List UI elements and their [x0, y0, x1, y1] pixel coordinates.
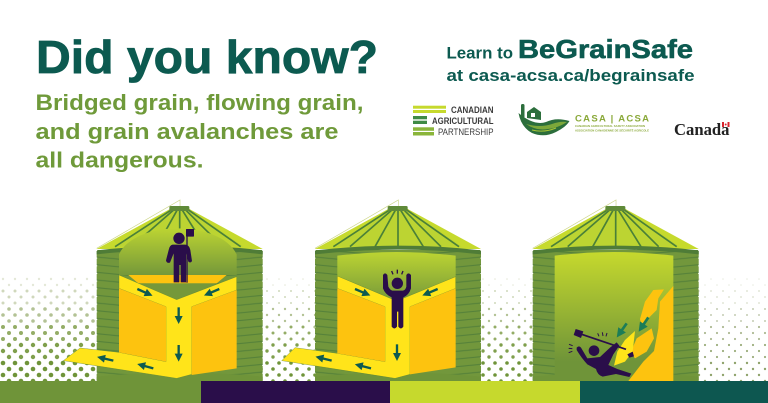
title: Did you know? — [36, 31, 378, 83]
upper grain flame — [640, 289, 664, 327]
interior — [555, 252, 673, 381]
interior dome — [119, 228, 237, 275]
bridged cavity — [138, 283, 217, 300]
halftone dot background — [0, 276, 768, 381]
logo: CASA ACSA: ASSOCIATION CANADIENNE DE SÉCURITÉ AGRICOLE — [575, 128, 649, 132]
bottom colour bar — [0, 381, 768, 403]
subtitle text block — [36, 90, 364, 172]
flow arrows — [96, 285, 221, 372]
grain surface band — [128, 275, 227, 283]
person sinking with raised arms — [383, 270, 411, 328]
logo: Canadian Agricultural Partnership — [413, 105, 494, 138]
person falling with shovel — [569, 329, 634, 377]
middle grain flame — [631, 328, 654, 358]
flow arrows — [315, 285, 439, 372]
logo: Canadian Agricultural Partnership: PARTNERSHIP — [438, 127, 494, 138]
silo 2: flowing grain — [282, 200, 481, 381]
subtitle text block: and grain avalanches are — [36, 119, 338, 144]
flowing grain channel — [282, 276, 456, 378]
call to action: Learn to — [446, 44, 513, 62]
falling grain arrows — [613, 315, 652, 340]
subtitle text block: all dangerous. — [36, 148, 204, 172]
flowing grain channel — [63, 275, 237, 378]
left grain mass — [337, 288, 385, 362]
call to action: BeGrainSafe — [518, 34, 693, 64]
right grain mass — [410, 288, 456, 374]
interior headspace — [337, 252, 456, 302]
logo: CASA ACSA: CASA | ACSA — [575, 114, 649, 125]
logo: Canadian Agricultural Partnership: AGRICULTURAL — [432, 116, 494, 127]
right grain mass — [192, 290, 237, 375]
person with shovel standing on bridge — [166, 229, 194, 283]
left grain mass — [119, 288, 166, 362]
logo: Canada wordmark: Canada — [674, 120, 730, 139]
subtitle text block: Bridged grain, flowing grain, — [36, 90, 364, 115]
silo 1: bridged grain — [63, 200, 263, 381]
logo: CASA ACSA: CANADIAN AGRICULTURAL SAFETY ASSOCIATION — [575, 124, 645, 128]
silo 3: grain avalanche — [533, 200, 699, 381]
call to action — [446, 34, 694, 85]
avalanching grain mass — [628, 286, 673, 381]
logo: Canadian Agricultural Partnership: CANADIAN — [451, 105, 494, 116]
call to action: at casa-acsa.ca/begrainsafe — [446, 66, 694, 85]
grain tongue — [614, 331, 635, 366]
logo: CASA ACSA — [518, 104, 649, 135]
